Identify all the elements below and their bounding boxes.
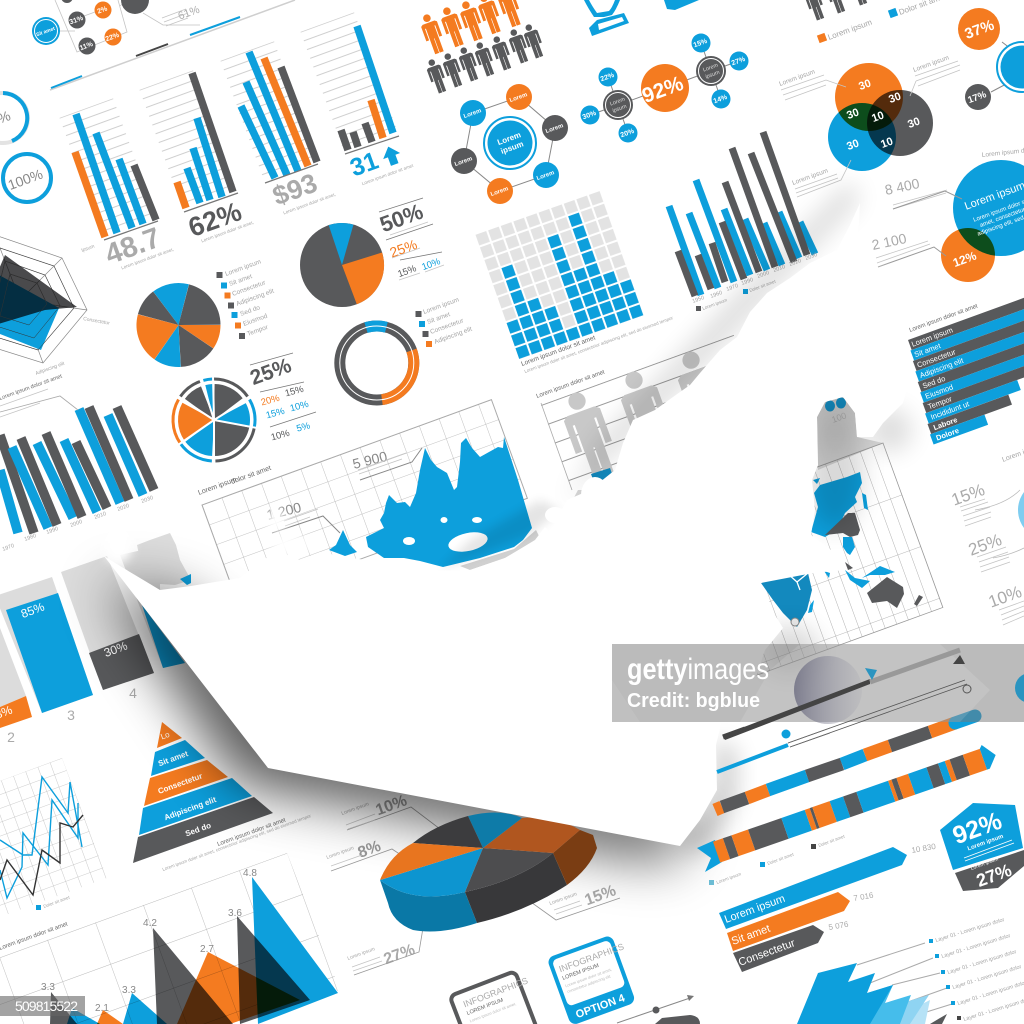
venn diagram: 30	[857, 77, 873, 93]
network hub: ipsum	[500, 139, 525, 156]
people pictogram	[418, 0, 546, 95]
stripe table right: Sed do	[921, 374, 947, 390]
image id strip: 509815522	[15, 998, 78, 1014]
bar chart 93 dollars: $93	[269, 168, 321, 211]
stats 25 percent	[247, 353, 316, 443]
network hub: Lorem	[454, 156, 473, 168]
people and legend top right	[802, 0, 948, 43]
option card blue	[547, 932, 643, 1024]
bubble cluster 92 percent: 15%	[693, 38, 709, 49]
column chart 85 percent: 30%	[102, 638, 130, 660]
stripe table right: Incididunt ut	[929, 399, 971, 422]
pie labels 3D: Lorem ipsum	[326, 845, 355, 861]
stripe table right: Consectetur	[916, 347, 957, 370]
layer labels: Layer 01 - Lorem ipsum dolor	[952, 964, 1022, 991]
pie labels 3D: 15%	[583, 882, 618, 909]
stripe table right: Adipiscing elit	[918, 356, 965, 380]
venn diagram: 10	[870, 109, 886, 125]
stripe table right: Dolore	[935, 426, 960, 442]
ring 100 percent	[3, 154, 51, 202]
pie chart seven slices	[149, 296, 208, 354]
right map grid: 100	[830, 410, 848, 425]
network hub: Lorem	[463, 108, 482, 120]
bubble cluster 92 percent: ipsum	[612, 104, 628, 114]
year labels: 1990	[741, 277, 754, 287]
layer labels	[929, 917, 1024, 1023]
striped ribbon arrow	[697, 742, 999, 872]
3D pie chart	[380, 812, 597, 931]
pie chart 50 percent	[300, 223, 384, 307]
legend paired bars: Dolor sit amet	[749, 278, 777, 293]
legend donut: Adipiscing elit	[433, 326, 473, 346]
bar chart 31 up	[301, 12, 415, 186]
stats 50 percent: 25%	[387, 236, 419, 261]
triangle chart: 3.3	[122, 985, 136, 996]
hexagon badge: 92%	[949, 807, 1006, 850]
labels lower left bars: 1970	[2, 543, 15, 553]
stats 25 percent: 25%	[247, 354, 295, 390]
triangle chart: 3.3	[41, 982, 55, 993]
bubbles top right	[958, 8, 1024, 110]
bubble cluster 92 percent: 14%	[713, 94, 729, 105]
bar chart 93 dollars: Lorem ipsum dolor sit amet,	[283, 192, 336, 215]
icon: blue tab	[664, 0, 699, 10]
option card gray: Lorem ipsum dolor sit amet,	[469, 1001, 517, 1023]
triangle chart: 2.7	[200, 944, 214, 955]
option card blue: Lorem ipsum dolor sit amet,	[564, 967, 612, 988]
pyramid: Sed do	[184, 821, 212, 838]
year labels: 2020	[789, 258, 802, 268]
legend ribbon: Dolor sit amet	[767, 851, 795, 866]
legend pie seven: Eiusmod	[242, 313, 269, 328]
bubbles top right: 37%	[962, 17, 996, 43]
stats 50 percent: 50%	[376, 199, 426, 237]
timeline	[50, 0, 295, 90]
venn diagram	[828, 63, 933, 171]
option card gray: LOREM IPSUM	[466, 997, 505, 1017]
year labels: 2030	[805, 252, 818, 262]
venn lorem ipsum: 12%	[951, 248, 979, 270]
gray map fragment left	[137, 533, 191, 590]
labels lower left bars: Lorem ipsum dolor sit amet	[0, 373, 63, 402]
network top left: 2%	[97, 5, 109, 16]
pie labels 3D: 10%	[374, 792, 409, 819]
arrow timeline bottom	[617, 995, 700, 1024]
stripe table caption: Lorem ipsum dolor sit amet	[909, 303, 979, 334]
stats 25 percent: 5%	[295, 420, 312, 435]
bubble cluster 92 percent: 92%	[639, 72, 687, 108]
venn labels: Lorem ipsum	[778, 68, 816, 88]
triangle chart: 4.2	[143, 918, 157, 929]
stats 25 percent: 20%	[260, 393, 281, 408]
map chart lower: 5 900	[351, 448, 389, 472]
layer labels: Layer 01 - Lorem ipsum dolor	[947, 949, 1017, 976]
stripe table right: Lorem ipsum	[910, 325, 954, 349]
legend pie seven	[216, 258, 275, 339]
person height chart: Lorem ipsum dolor sit amet	[536, 369, 606, 400]
column chart 85 percent: 3	[67, 707, 75, 723]
labels lower left bars: 2000	[70, 519, 83, 529]
venn diagram: 30	[845, 106, 861, 122]
option card blue: OPTION 4	[574, 992, 627, 1021]
option card blue: INFOGRAPHICS	[558, 941, 625, 974]
pyramid: Adipiscing elit	[163, 795, 218, 822]
labels lower left bars	[0, 373, 154, 553]
legend ribbon: Dolor sit amet	[818, 833, 846, 848]
legend donut: Consectetur	[429, 317, 465, 336]
pyramid: Lorem ipsum dolor sit amet	[217, 817, 287, 848]
right map grid	[695, 397, 943, 676]
ring 100 percent: 100%	[6, 166, 45, 193]
legend pie seven: Consectetur	[231, 279, 267, 298]
caption grid chart: Lorem ipsum dolor sit amet	[520, 334, 597, 368]
bar chart 48.7	[60, 98, 174, 271]
network top left: 61%	[177, 4, 202, 23]
network top left: 22%	[105, 32, 121, 43]
column chart 85 percent: 4	[129, 685, 137, 701]
pyramid: Lo	[159, 730, 171, 741]
network hub	[451, 84, 568, 204]
legend pie seven: Sed do	[239, 304, 261, 318]
bubble cluster 92 percent: 22%	[600, 72, 616, 83]
bar chart 62 percent: 62%	[184, 196, 245, 243]
legend ribbon	[709, 833, 846, 885]
stripe table right: Labore	[932, 415, 959, 432]
year labels: 1970	[726, 283, 739, 293]
network hub: Lorem	[536, 170, 555, 182]
hexagon badge: 27%	[974, 860, 1014, 891]
stats 50 percent: 10%	[420, 256, 442, 273]
arrow bars	[719, 842, 937, 972]
arrow bars: 10 830	[911, 842, 937, 855]
bar chart 48.7: 48.7	[101, 222, 165, 271]
hexagon badge: Lorem ipsum	[970, 856, 999, 872]
triangle chart: 2.1	[95, 1003, 109, 1014]
donut chart	[329, 316, 424, 410]
network hub: Lorem	[490, 186, 509, 198]
triangle chart: 3.6	[228, 908, 242, 919]
layer labels: Layer 01 - Lorem ipsum dolor	[941, 933, 1011, 960]
line chart	[0, 758, 107, 917]
bar chart 62 percent: Lorem ipsum dolor sit amet,	[201, 220, 254, 243]
people and legend top right: Lorem ipsum	[827, 17, 873, 42]
map chart lower	[197, 400, 540, 604]
pyramid	[133, 722, 312, 872]
legend donut: Sit amet	[426, 311, 451, 326]
bar chart lower left	[0, 407, 154, 533]
arrow bars: 7 016	[853, 891, 875, 903]
bar chart 62 percent	[140, 70, 254, 243]
bubble cluster 92 percent: 30%	[582, 110, 598, 121]
venn labels: Lorem ipsum	[791, 167, 829, 187]
stripe table right	[897, 272, 1024, 445]
stats 25 percent: 15%	[265, 406, 286, 421]
bubble cluster 92 percent: Lorem	[702, 62, 719, 74]
striped bar one	[715, 716, 975, 810]
stats 25 percent: 10%	[289, 399, 310, 414]
column chart 85 percent	[0, 550, 190, 745]
bar chart 93 dollars	[221, 41, 336, 215]
triangle chart	[0, 853, 340, 1024]
network top left	[32, 0, 202, 54]
pie labels 3D: 8%	[356, 838, 383, 862]
stripe table right: Eiusmod	[924, 382, 954, 401]
labels lower left bars: 2010	[94, 511, 107, 521]
bubble cluster 92 percent: ipsum	[705, 70, 721, 80]
venn diagram: 30	[906, 115, 922, 131]
venn diagram: 10	[879, 135, 895, 151]
torn white page	[104, 203, 910, 846]
network top left: 11%	[79, 41, 95, 52]
bar chart 48.7: Lorem ipsum dolor sit amet,	[121, 247, 174, 270]
year labels: 1960	[710, 290, 723, 300]
network top left: Sit amet	[35, 26, 56, 38]
page shadow	[105, 180, 863, 862]
radar chart	[0, 235, 111, 377]
venn lorem ipsum	[941, 160, 1024, 282]
square grid chart	[474, 190, 645, 360]
map chart lower: Lorem ipsum	[197, 476, 238, 497]
hexagon badge	[940, 803, 1024, 891]
map chart lower: dolor sit amet	[230, 465, 272, 486]
year labels: 1950	[692, 295, 705, 305]
legend donut: Lorem ipsum	[422, 296, 460, 316]
person height chart	[536, 335, 772, 510]
ring 0 percent	[0, 93, 28, 143]
bubble cluster 92 percent: 20%	[620, 128, 636, 139]
venn diagram: 30	[845, 137, 861, 153]
caption grid chart: Lorem ipsum dolor sit amet, consectetur adipiscing elit, sed do eiusmod tempor	[524, 315, 674, 374]
arrow bars: Consectetur	[737, 937, 797, 969]
right percent labels: 15%	[949, 480, 987, 510]
labels lower left bars: 1990	[46, 526, 59, 536]
bar chart 31 up: 31	[346, 147, 382, 182]
pie labels 3D: Lorem ipsum	[341, 801, 370, 817]
venn labels: Lorem ipsum	[912, 54, 950, 74]
legend pie seven: Tempor	[246, 324, 270, 338]
line chart: Dolor sit amet	[43, 894, 71, 909]
radar chart: Ipsum	[81, 244, 95, 254]
watermark panel: gettyimages	[627, 653, 769, 686]
pie labels 3D: Lorem ipsum	[549, 891, 578, 907]
column chart 85 percent: 2	[7, 729, 15, 745]
soft white tears	[104, 270, 907, 563]
labels 8 400 and 2 100	[870, 146, 1024, 267]
network hub: Lorem	[496, 130, 522, 147]
legend pie seven: Adipiscing elit	[235, 288, 275, 308]
right percent labels: 25%	[966, 530, 1004, 560]
legend ribbon: Lorem ipsum	[716, 871, 742, 885]
arrow bars: 5 076	[828, 920, 850, 932]
labels lower left bars: 2020	[117, 503, 130, 513]
bar chart 31 up: Lorem ipsum dolor sit amet	[361, 163, 415, 186]
right percent labels: 10%	[986, 582, 1024, 612]
hexagon badge: Lorem ipsum	[967, 834, 1004, 852]
stats 50 percent: 15%	[396, 263, 418, 280]
year labels: 2010	[773, 264, 786, 274]
arrow bars: Sit amet	[730, 923, 772, 948]
map chart lower: 1 200	[265, 499, 303, 523]
year labels: 2000	[757, 270, 770, 280]
right percent labels	[949, 443, 1024, 625]
bubble cluster 92 percent: Lorem	[609, 96, 626, 108]
column chart 85 percent: 85%	[19, 599, 47, 621]
stripe table right: Sit amet	[913, 341, 943, 359]
watermark panel	[612, 644, 1024, 747]
watermark panel: Credit: bgblue	[627, 690, 760, 712]
labels 8 400 and 2 100: 2 100	[870, 230, 908, 253]
triangle chart: Lorem ipsum dolor sit amet	[0, 921, 69, 952]
stats 50 percent	[376, 198, 444, 280]
legend pie seven: Lorem ipsum	[224, 258, 262, 278]
pyramid: Consectetur	[157, 771, 204, 796]
image id strip	[0, 996, 85, 1016]
network hub: Lorem	[509, 92, 528, 104]
year labels	[692, 252, 818, 305]
radar chart: Adipiscing elit	[35, 361, 66, 377]
legend donut	[416, 296, 473, 347]
venn diagram: 30	[887, 90, 903, 106]
labels lower left bars: 1980	[24, 533, 37, 543]
stats 25 percent: 10%	[270, 428, 291, 443]
icon: podium	[584, 0, 629, 36]
labels 8 400 and 2 100: 8 400	[883, 175, 921, 198]
triangle chart: 4.8	[243, 868, 257, 879]
exploded pie 25 percent	[157, 363, 271, 477]
stripe table right: Tempor	[927, 394, 954, 411]
arrow bars: Lorem ipsum	[723, 893, 787, 926]
pyramid: Lorem ipsum dolor sit amet, consectetur adipiscing elit, sed do eiusmod tempor	[162, 813, 312, 872]
layered chevrons chart	[797, 943, 952, 1024]
radar chart: Consectetur	[83, 316, 111, 327]
option card gray	[450, 968, 545, 1024]
labels lower left bars: 2030	[141, 495, 154, 505]
legend paired bars: Lorem ipsum	[702, 297, 728, 311]
pie labels 3D	[326, 792, 620, 975]
paired bar chart years	[669, 132, 815, 296]
legend pie seven: Sit amet	[228, 273, 253, 288]
option card blue: consectetur adipiscing elit	[566, 973, 612, 994]
pie labels 3D: Lorem ipsum	[347, 946, 376, 962]
stats 25 percent: 15%	[284, 384, 305, 399]
option card gray: INFOGRAPHICS	[462, 975, 529, 1009]
slider	[717, 728, 830, 772]
venn labels	[778, 54, 960, 197]
network hub: Lorem	[545, 123, 564, 135]
bubbles top right: 17%	[966, 89, 988, 106]
network top left: 31%	[69, 15, 85, 26]
bubble cluster 92 percent: 27%	[731, 56, 747, 67]
option card blue: LOREM IPSUM	[562, 963, 600, 982]
layer labels: Layer 01 - Lorem ipsum dolor	[935, 917, 1005, 944]
pyramid: Sit amet	[157, 749, 190, 768]
legend paired bars	[696, 278, 777, 311]
bubble cluster 92 percent	[580, 34, 748, 142]
pie labels 3D: 27%	[382, 941, 417, 968]
